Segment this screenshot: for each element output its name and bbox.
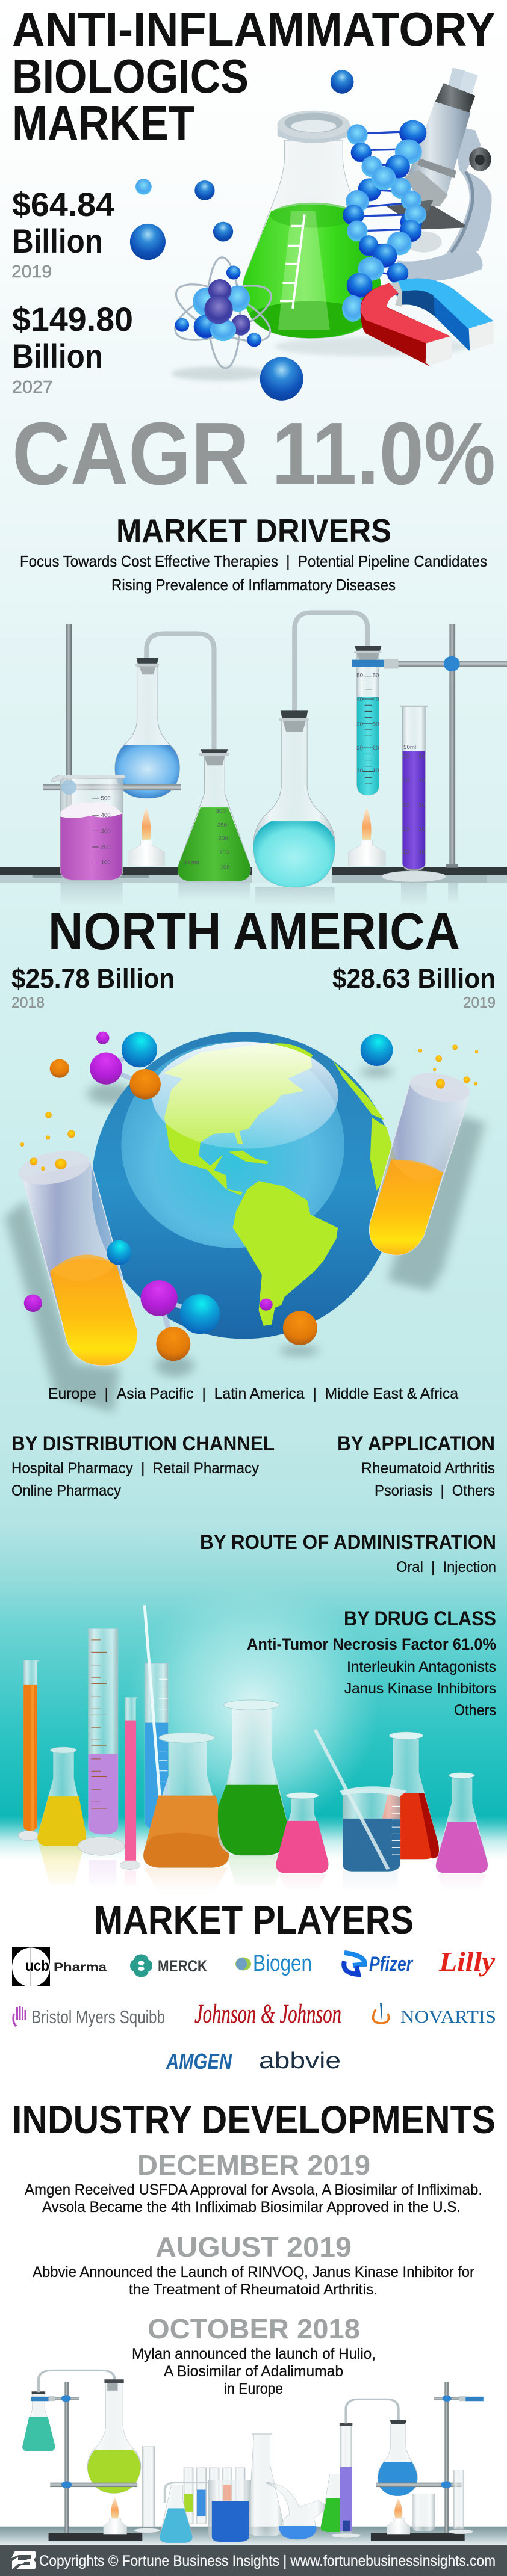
development: August 2019: Abbvie Announced the Launch of RINVOQ, Janus Kinase Inhibitor for [33, 2264, 474, 2281]
blue cylinder [145, 1663, 168, 1828]
stat: 2019 market value: $64.84 [12, 185, 114, 223]
logo: UCB Pharma: ucb [25, 1958, 49, 1974]
icon: Fortune Business Insights logo [11, 2551, 36, 2569]
segment: drug class: Anti-Tumor Necrosis Factor 61.0% [247, 1635, 496, 1653]
stat: 2027 market value: $149.80 [12, 300, 133, 338]
red flask [375, 1732, 439, 1859]
small blue flask [160, 2483, 210, 2543]
development: August 2019: AUGUST 2019 [155, 2231, 352, 2263]
violet cylinder: 40 [418, 777, 425, 783]
logo: UCB Pharma [12, 1947, 107, 1986]
violet cylinder [382, 706, 446, 882]
glass rod [145, 1605, 160, 1800]
purple beaker: 500 [101, 795, 111, 801]
round blue flask [115, 658, 179, 798]
stat: 2018 regional value: $25.78 Billion [11, 963, 175, 994]
pink cylinder [120, 1697, 140, 1870]
development: October 2018: in Europe [224, 2380, 283, 2397]
right stand [371, 2382, 484, 2541]
violet cylinder: 40 [403, 777, 409, 783]
development: December 2019: Avsola Became the 4th Infliximab Biosimilar Approved in the U.S. [42, 2199, 461, 2216]
development: August 2019: the Treatment of Rheumatoid Arthritis. [129, 2281, 378, 2298]
tubes [146, 612, 368, 752]
logo: AbbVie: abbvie [259, 2048, 341, 2074]
purple beaker [51, 775, 126, 880]
teal test tube: 10 [356, 767, 363, 774]
violet cylinder: 50 [403, 753, 409, 759]
orange flask [143, 1733, 229, 1867]
violet cylinder: 10 [403, 848, 409, 855]
stat: 2019 regional value: 2019 [463, 994, 496, 1011]
green round flask [87, 2379, 141, 2493]
logo: Biogen: Biogen [253, 1951, 312, 1976]
map: Americas [163, 1043, 396, 1326]
teal test tube: 20 [373, 744, 379, 751]
purple beaker: 200 [101, 843, 111, 849]
yellow flask [37, 1747, 86, 1846]
segment: distribution channel: BY DISTRIBUTION CHANNEL [11, 1432, 275, 1455]
green erlenmeyer: 300 [216, 807, 226, 814]
violet cylinder: 50 [418, 753, 425, 759]
teal test tube: 30 [373, 721, 379, 727]
logo: Novartis: NOVARTIS [400, 2007, 496, 2027]
tube left [39, 2370, 115, 2392]
teal flask [22, 2391, 71, 2451]
illustration: hero lab scene [130, 67, 494, 401]
logo: Johnson & Johnson: Johnson & Johnson [194, 1999, 341, 2029]
magenta flask [436, 1773, 488, 1873]
segment: route of administration: Oral | Injection [396, 1559, 496, 1576]
logo: Pfizer [344, 1953, 413, 1976]
logo: Amgen: AMGEN [166, 2049, 232, 2074]
development: August 2019 [33, 2231, 474, 2298]
green small flask [320, 2474, 352, 2532]
green erlenmeyer: 150 [219, 849, 229, 855]
green erlenmeyer: 100 [220, 864, 230, 870]
segment: drug class: Others [454, 1702, 496, 1719]
big clear flask [248, 2433, 284, 2536]
segment: drug class: Janus Kinase Inhibitors [344, 1680, 496, 1697]
retort stands [66, 624, 507, 870]
development: December 2019: Amgen Received USFDA Approval for Avsola, A Biosimilar of Infliximab. [25, 2181, 482, 2198]
icon: DNA helix [342, 120, 426, 322]
teal test tube: 40 [356, 696, 363, 703]
logo: UCB Pharma: Pharma [54, 1961, 107, 1974]
shadows [5, 1066, 485, 1413]
logo: Biogen [235, 1951, 312, 1976]
stat: 2018 regional value [11, 963, 175, 1011]
green flask [218, 1700, 288, 1855]
violet cylinder: 30 [418, 801, 425, 808]
segment: distribution channel: Hospital Pharmacy | Retail Pharmacy [11, 1460, 259, 1477]
illustration: lab bench at bottom [0, 2370, 507, 2545]
segment: application: Rheumatoid Arthritis [361, 1460, 495, 1477]
stat: 2019 market value: Billion [12, 222, 103, 260]
small beaker [412, 2494, 435, 2531]
retort [267, 2482, 329, 2539]
heading: market drivers: MARKET DRIVERS [116, 512, 391, 549]
violet cylinder: 20 [418, 825, 425, 832]
illustration: globe with test tubes [5, 1032, 485, 1413]
stat: 2019 regional value: $28.63 Billion [332, 963, 496, 994]
burner left [104, 2497, 127, 2534]
logo: Bristol Myers Squibb: Bristol Myers Squibb [31, 2006, 165, 2027]
violet cylinder: 50ml [403, 744, 416, 750]
stat: 2019 market value: 2019 [11, 262, 52, 282]
stat: 2019 market value [11, 185, 114, 282]
teal test tube [352, 646, 384, 795]
reflections [60, 883, 458, 905]
text: market drivers list: Rising Prevalence of Inflammatory Diseases [111, 576, 396, 594]
stat: 2027 market value: 2027 [12, 378, 53, 397]
violet cylinder: 10 [418, 848, 425, 855]
logo: Pfizer: Pfizer [369, 1953, 413, 1976]
segment: drug class [247, 1607, 496, 1719]
bench [0, 867, 507, 883]
development: December 2019: DECEMBER 2019 [137, 2149, 370, 2181]
purple cylinder [331, 2423, 361, 2538]
test tubes [184, 2468, 245, 2524]
title [12, 2, 496, 150]
logo: Novartis [373, 2003, 496, 2027]
segment: drug class: Interleukin Antagonists [347, 1659, 496, 1675]
illustration: colourful glassware [0, 1605, 507, 1892]
measuring cylinder [134, 2447, 160, 2533]
large cyan round flask [254, 710, 335, 887]
purple tall cylinder [78, 1629, 125, 1855]
title: MARKET [12, 96, 194, 150]
green erlenmeyer: 200 [218, 835, 228, 842]
burner right [387, 2498, 410, 2534]
title: BIOLOGICS [12, 49, 249, 103]
reflection fade [0, 1846, 507, 1892]
segment: route of administration [200, 1531, 496, 1576]
left stand [49, 2382, 142, 2541]
text: other regions: Europe | Asia Pacific | Latin America | Middle East & Africa [48, 1385, 458, 1402]
teal test tube: 30 [356, 721, 363, 727]
stat: 2027 market value [12, 300, 133, 397]
development: October 2018: OCTOBER 2018 [148, 2313, 360, 2344]
development: December 2019 [25, 2149, 482, 2216]
small cylinder [449, 2470, 473, 2534]
segment: application [337, 1432, 495, 1499]
pink flask [276, 1792, 328, 1873]
blue round flask [378, 2420, 417, 2496]
icon: atom [168, 257, 278, 369]
orange cylinder [18, 1660, 40, 1841]
globe [92, 1032, 397, 1339]
tube right [346, 2399, 399, 2423]
stat: 2018 regional value: 2018 [11, 994, 45, 1011]
right test tube [370, 1068, 473, 1255]
molecules [24, 1032, 393, 1361]
background glow [90, 1564, 428, 1817]
left test tube [15, 1145, 137, 1366]
green erlenmeyer [178, 749, 250, 881]
segment: distribution channel [11, 1432, 275, 1499]
development: October 2018: A Biosimilar of Adalimumab [164, 2363, 343, 2380]
heading: North America: NORTH AMERICA [48, 902, 460, 961]
development: October 2018: Mylan announced the launch of Hulio, [132, 2346, 376, 2362]
table [0, 2527, 507, 2545]
purple beaker: 400 [101, 812, 111, 818]
icon: green erlenmeyer flask [243, 111, 381, 338]
teal test tube: 40 [373, 696, 379, 703]
purple beaker: 300 [101, 828, 111, 834]
segment: application: BY APPLICATION [337, 1432, 495, 1455]
logo: Merck [130, 1954, 207, 1977]
burners [128, 807, 385, 866]
green erlenmeyer: 250 [217, 822, 227, 828]
logo: Lilly: Lilly [438, 1946, 496, 1977]
logo: Bristol Myers Squibb [13, 2006, 165, 2027]
violet cylinder: 30 [403, 801, 409, 808]
purple beaker: 100 [101, 859, 111, 865]
illustration: lab bench with flasks [0, 612, 507, 905]
segment: distribution channel: Online Pharmacy [11, 1482, 121, 1499]
teal test tube: 50 [373, 672, 379, 678]
bubbles [20, 1044, 478, 1171]
icon: horseshoe magnet [361, 279, 494, 366]
blue beaker [208, 2480, 250, 2542]
teal test tube: 50 [356, 672, 363, 678]
green erlenmeyer: 300ml [183, 859, 199, 866]
icon: floating balls [130, 70, 353, 401]
teal test tube: 10 [373, 767, 379, 774]
stat: 2027 market value: Billion [12, 337, 103, 375]
clamp bar left [50, 2481, 137, 2488]
heading: market players: MARKET PLAYERS [94, 1897, 414, 1942]
development: October 2018 [132, 2313, 376, 2397]
text: market drivers list [20, 552, 487, 594]
stat: 2019 regional value [332, 963, 496, 1011]
left clamp bar [43, 784, 181, 790]
logo: Merck: MERCK [158, 1957, 207, 1975]
icon: microscope [387, 67, 492, 281]
reflections [39, 1844, 487, 1892]
segment: application: Psoriasis | Others [375, 1482, 495, 1499]
teal test tube: 20 [356, 744, 363, 751]
violet cylinder: 20 [403, 825, 409, 832]
beaker with stirring rod [315, 1730, 407, 1872]
logos [12, 1946, 496, 2074]
footer bar [0, 2545, 507, 2576]
